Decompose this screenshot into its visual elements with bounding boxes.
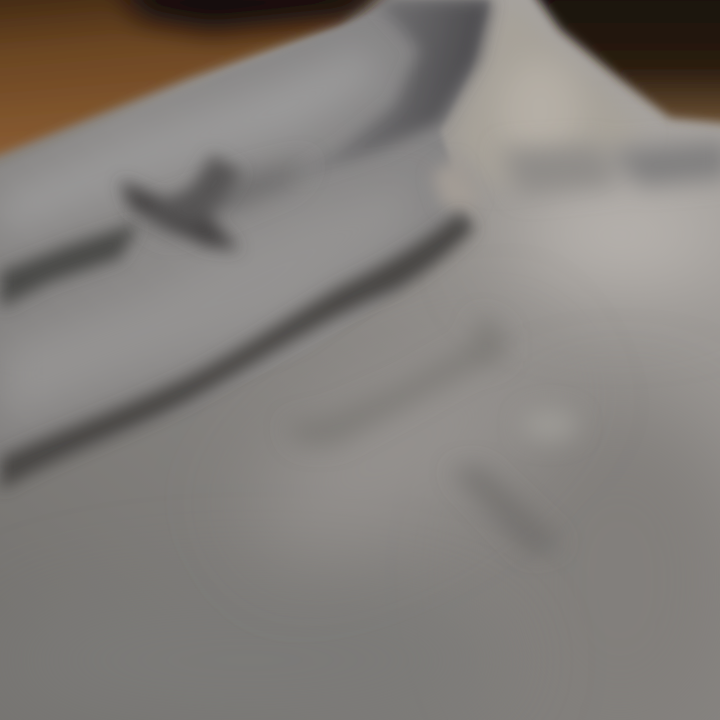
collar flap: [0, 0, 490, 482]
collar inner dark fold: [290, 0, 492, 180]
collar lower edge shadow: [0, 212, 475, 490]
grey back neck band: [500, 140, 720, 195]
collar highlights: [0, 45, 420, 430]
faint body creases: [450, 410, 578, 555]
collar button tab: [432, 158, 478, 218]
wood background: top right: [525, 0, 720, 125]
collar upper dark seam: [0, 222, 140, 308]
cream inner neck fabric: [450, 0, 645, 185]
faint stitched mark on shirt body: [285, 315, 505, 445]
wood background: top left: [0, 0, 400, 160]
embroidered cross mark on collar: [120, 155, 242, 250]
